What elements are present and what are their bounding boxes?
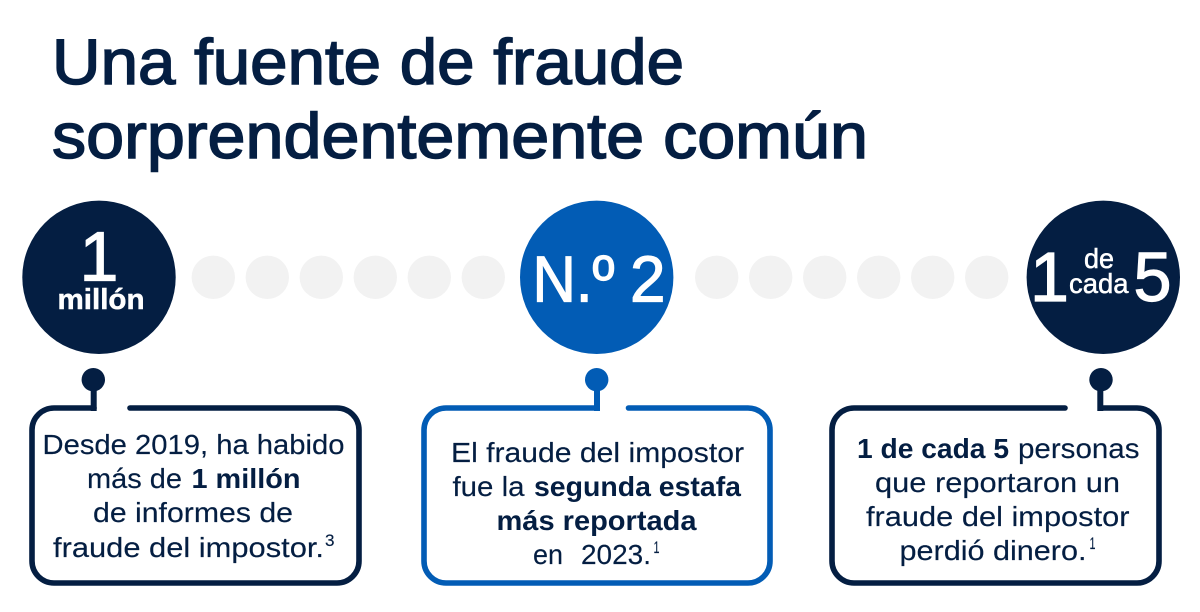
callout text: más de — [87, 463, 182, 494]
title — [52, 26, 868, 172]
stat circle: 1 millón: 1 — [80, 218, 118, 296]
callout pin — [82, 368, 105, 411]
callout text: que reportaron un — [875, 467, 1120, 498]
callout text: en — [533, 539, 563, 570]
panel: 1 million reports — [22, 201, 359, 583]
stat circle: N.º 2 — [520, 201, 673, 354]
callout text: personas — [1018, 433, 1140, 464]
callout frame — [32, 408, 359, 583]
callout text: segunda estafa — [534, 471, 741, 502]
callout text: 1 millón — [192, 463, 300, 494]
callout pin — [1089, 368, 1113, 411]
callout text — [857, 433, 1140, 566]
callout text — [451, 437, 744, 570]
panel: second most reported — [424, 201, 770, 583]
callout text: perdió dinero. — [900, 535, 1086, 566]
callout text: fraude del impostor. — [53, 532, 324, 563]
stat circle: 1 de cada 5: 1 — [1030, 238, 1069, 316]
stat circle: 1 de cada 5: 5 — [1134, 238, 1172, 316]
callout text — [42, 429, 345, 563]
callout pin — [585, 368, 608, 411]
panel: 1 in 5 lost money — [832, 201, 1180, 583]
stat circle: 1 de cada 5: cada — [1069, 268, 1129, 299]
callout text: 2023. — [581, 539, 651, 570]
stat circle: 1 millón — [22, 201, 176, 354]
callout text: fue la — [452, 471, 525, 502]
callout text: 1 de cada 5 — [857, 433, 1009, 464]
title: sorprendentemente común — [52, 100, 868, 172]
callout text: Desde 2019, ha habido — [42, 429, 345, 460]
callout text: de informes de — [93, 497, 293, 528]
callout text: El fraude del impostor — [451, 437, 744, 468]
dotted connector: right — [695, 256, 1008, 299]
callout text: fraude del impostor — [866, 501, 1130, 532]
stat circle: 1 de cada 5 — [1027, 201, 1180, 354]
callout frame — [424, 408, 770, 583]
stat circle: 1 de cada 5: de — [1084, 243, 1114, 274]
callout text: 1 — [1090, 534, 1096, 553]
stat circle: N.º 2: N.º — [532, 242, 614, 316]
callout text: 1 — [654, 538, 660, 557]
callout text: más reportada — [496, 505, 697, 536]
callout frame — [832, 408, 1159, 583]
callout text: 3 — [325, 531, 334, 550]
dotted connector: left — [192, 256, 505, 299]
title: Una fuente de fraude — [52, 26, 684, 98]
stat circle: N.º 2: 2 — [630, 242, 666, 316]
stat circle: 1 millón: millón — [58, 284, 144, 316]
